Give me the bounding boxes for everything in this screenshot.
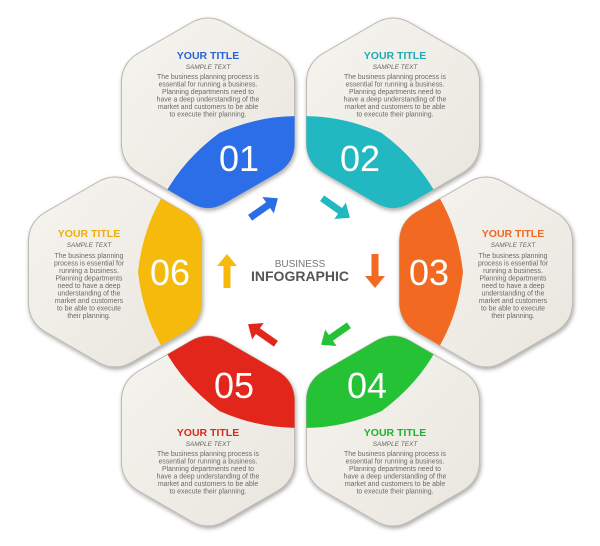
text block 1: Planning departments need to: [162, 89, 254, 96]
number 02: 02: [340, 138, 380, 179]
text block 6: [54, 228, 125, 320]
text block 4: to execute their planning.: [356, 488, 434, 496]
text block 4: [344, 427, 447, 496]
text block 2: [344, 50, 447, 118]
text block 3: SAMPLE TEXT: [491, 242, 536, 249]
text block 5: SAMPLE TEXT: [186, 441, 231, 448]
text block 2: essential for running a business.: [346, 82, 444, 88]
number 01: 01: [219, 138, 259, 179]
text block 4: SAMPLE TEXT: [373, 441, 418, 448]
text block 1: [157, 50, 260, 118]
text block 5: essential for running a business.: [159, 458, 257, 466]
hexagon 6: [28, 177, 225, 367]
text block 5: YOUR TITLE: [177, 427, 239, 439]
hexagon 5: [119, 335, 299, 531]
number 05: 05: [214, 365, 254, 406]
text block 2: have a deep understanding of the: [344, 96, 447, 104]
text block 2: market and customers to be able: [345, 104, 445, 111]
text block 2: SAMPLE TEXT: [373, 64, 418, 71]
text block 3: process is essential for: [478, 260, 549, 268]
text block 6: understanding of the: [58, 290, 121, 298]
hexagon 2: [304, 17, 484, 213]
text block 1: market and customers to be able: [158, 104, 258, 111]
text block 6: market and customers: [55, 298, 124, 305]
arrow red: [242, 316, 282, 352]
center title: BUSINESS: [275, 259, 326, 270]
text block 2: YOUR TITLE: [364, 50, 426, 62]
text block 1: The business planning process is: [157, 74, 259, 81]
text block 4: essential for running a business.: [346, 458, 444, 466]
text block 3: YOUR TITLE: [482, 228, 544, 240]
text block 2: The business planning process is: [344, 74, 446, 81]
text block 6: to be able to execute: [57, 306, 121, 312]
number 04: 04: [347, 365, 387, 406]
text block 3: understanding of the: [482, 290, 545, 298]
text block 3: [478, 228, 549, 320]
text block 6: The business planning: [55, 253, 124, 260]
center title: [251, 259, 349, 284]
text block 5: [157, 427, 260, 496]
arrow blue: [244, 190, 284, 226]
text block 5: have a deep understanding of the: [157, 474, 260, 480]
number 03: 03: [409, 252, 449, 293]
text block 1: SAMPLE TEXT: [186, 64, 231, 71]
text block 5: market and customers to be able: [158, 481, 258, 488]
text block 3: running a business.: [483, 268, 543, 275]
text block 6: need to have a deep: [58, 283, 121, 290]
center title: INFOGRAPHIC: [251, 268, 349, 284]
arrow yellow: [217, 254, 237, 288]
text block 1: have a deep understanding of the: [157, 96, 260, 104]
text block 3: The business planning: [479, 253, 548, 260]
text block 4: The business planning process is: [344, 451, 446, 458]
text block 5: to execute their planning.: [170, 488, 247, 496]
hexagon 3: [376, 177, 573, 367]
text block 4: Planning departments need to: [349, 466, 441, 473]
text block 3: need to have a deep: [482, 283, 545, 290]
text block 5: Planning departments need to: [162, 466, 254, 473]
text block 6: running a business.: [59, 268, 119, 275]
text block 4: YOUR TITLE: [364, 427, 426, 439]
text block 3: Planning departments: [479, 276, 547, 282]
hexagon 1: [119, 17, 299, 213]
text block 1: YOUR TITLE: [177, 50, 239, 62]
text block 4: market and customers to be able: [345, 481, 445, 488]
text block 2: Planning departments need to: [349, 89, 441, 96]
text block 1: to execute their planning.: [170, 112, 247, 118]
text block 3: market and customers: [479, 298, 548, 305]
text block 6: Planning departments: [55, 276, 123, 282]
hexagon 4: [304, 335, 484, 531]
text block 6: process is essential for: [54, 260, 125, 268]
text block 3: to be able to execute: [481, 306, 545, 312]
text block 4: have a deep understanding of the: [344, 474, 447, 480]
text block 6: YOUR TITLE: [58, 228, 120, 240]
number 06: 06: [150, 252, 190, 293]
text block 2: to execute their planning.: [356, 112, 434, 118]
text block 5: The business planning process is: [157, 451, 259, 458]
arrow orange: [365, 254, 385, 288]
text block 6: their planning.: [67, 313, 111, 320]
text block 6: SAMPLE TEXT: [67, 242, 112, 249]
arrow teal: [316, 190, 356, 226]
text block 1: essential for running a business.: [159, 82, 257, 88]
arrow green: [315, 317, 355, 353]
text block 3: their planning.: [491, 313, 535, 320]
